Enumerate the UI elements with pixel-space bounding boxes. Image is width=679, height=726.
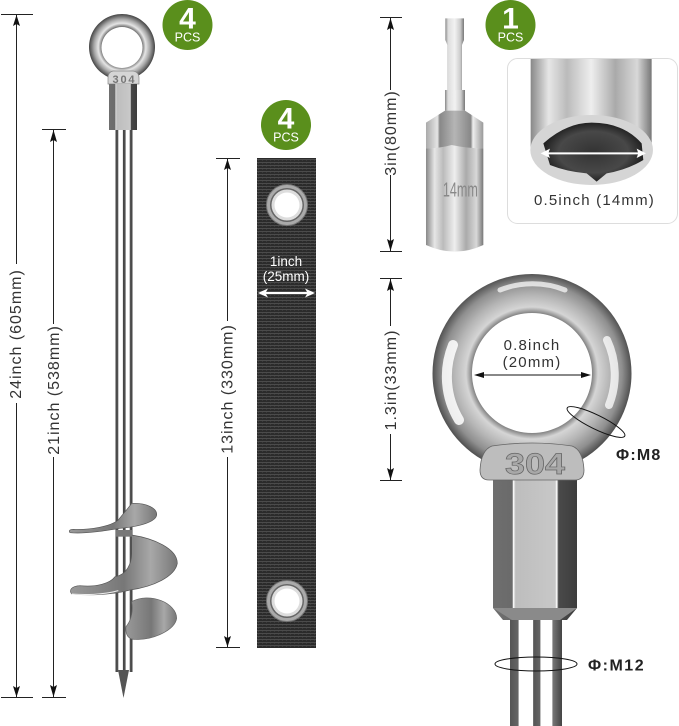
dimension: 3 inch socket bbox=[380, 18, 402, 252]
top grommet bbox=[266, 184, 308, 226]
auger blades bbox=[69, 503, 177, 639]
bit hex head bbox=[426, 111, 483, 148]
inset: socket opening bbox=[508, 58, 678, 224]
badge: 4 pcs anchor: PCS bbox=[175, 30, 200, 44]
badge: 4 pcs anchor: 4 bbox=[179, 2, 196, 36]
dimension: 21 inch: 21inch (538mm) bbox=[46, 325, 63, 455]
ring inner width label: (20mm) bbox=[503, 354, 561, 371]
dimension: 13 inch strap: 13inch (330mm) bbox=[220, 324, 236, 454]
bolt hex bbox=[493, 480, 577, 620]
dimension: 13 inch strap bbox=[216, 158, 240, 648]
strap width label: (25mm) bbox=[263, 269, 309, 284]
anchor tip bbox=[118, 670, 129, 698]
ring highlights bbox=[447, 284, 615, 420]
dimension: 1.3 inch eye bbox=[380, 278, 402, 480]
bolt collar: 304 bbox=[505, 448, 565, 481]
strap width label bbox=[263, 254, 309, 284]
bolt collar bbox=[480, 443, 584, 481]
ground anchor bbox=[69, 14, 177, 698]
badge: 4 pcs strap: 4 bbox=[278, 102, 295, 136]
bolt rod bbox=[510, 620, 562, 726]
M8 ring callout: Φ:M8 bbox=[616, 447, 662, 464]
badge: 4 pcs strap: PCS bbox=[273, 130, 299, 144]
badge: 1 pcs socket: 1 bbox=[502, 2, 519, 36]
bolt ring bbox=[433, 274, 632, 473]
M12 rod callout: Φ:M12 bbox=[588, 658, 645, 674]
dimension: 24 inch overall bbox=[1, 14, 33, 698]
ring inner width label bbox=[503, 337, 561, 371]
bit size marking: 14mm bbox=[443, 180, 478, 202]
ring inner width arrow bbox=[474, 372, 591, 378]
strap width arrow bbox=[258, 288, 315, 298]
bit cylinder bbox=[426, 145, 483, 252]
socket width label: 0.5inch (14mm) bbox=[534, 192, 655, 209]
ring inner width label: 0.8inch bbox=[504, 337, 560, 354]
M12 rod callout bbox=[495, 657, 645, 674]
bottom grommet bbox=[266, 580, 308, 622]
anchor collar: 304 bbox=[112, 74, 135, 86]
badge: 1 pcs socket bbox=[486, 0, 536, 50]
badge: 1 pcs socket: PCS bbox=[498, 30, 523, 44]
anchor collar bbox=[108, 71, 139, 86]
strap bbox=[257, 158, 316, 648]
eye bolt close-up bbox=[433, 274, 662, 726]
socket bit bbox=[426, 18, 483, 252]
socket interior bbox=[543, 123, 643, 182]
anchor eye ring bbox=[89, 14, 155, 80]
bit shank bbox=[445, 18, 464, 90]
dimension: 1.3 inch eye: 1.3in(33mm) bbox=[383, 330, 400, 430]
socket barrel bbox=[530, 59, 653, 185]
badge: 4 pcs strap bbox=[261, 100, 311, 150]
bit neck bbox=[445, 90, 465, 111]
strap width label: 1inch bbox=[270, 254, 302, 269]
socket width arrow bbox=[541, 149, 646, 158]
anchor rod bbox=[116, 130, 132, 672]
M8 ring callout bbox=[564, 402, 662, 464]
dimension: 24 inch overall: 24inch (605mm) bbox=[8, 269, 25, 399]
badge: 4 pcs anchor bbox=[162, 0, 212, 50]
dimension: 21 inch bbox=[42, 130, 66, 698]
anchor hex bbox=[109, 84, 137, 130]
dimension: 3 inch socket: 3in(80mm) bbox=[383, 90, 400, 176]
bolt neck bbox=[493, 608, 577, 620]
